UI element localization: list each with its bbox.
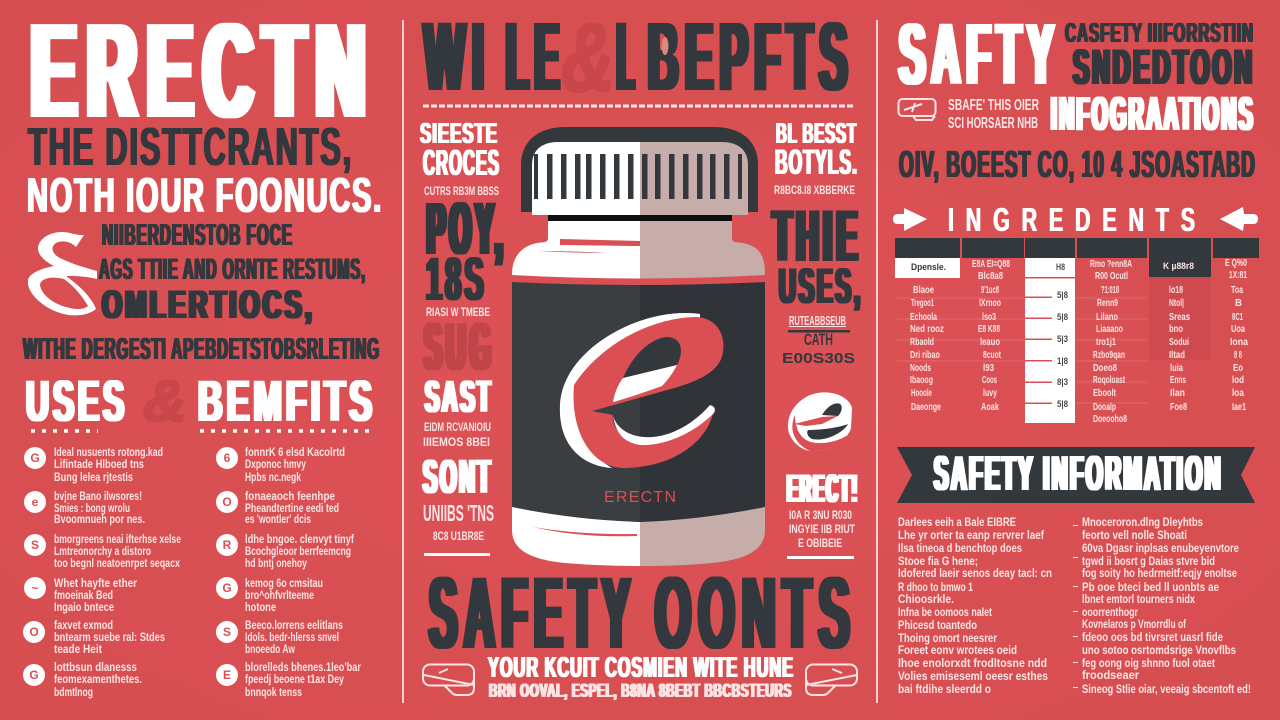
bullet 3: [24, 534, 181, 570]
bullet 9: ldhe bngoe. clenvyt tinyf: [245, 534, 354, 546]
side text: left of bottle: SAST: [425, 371, 493, 422]
bullet 2: [24, 491, 145, 526]
bullet 12: [216, 662, 361, 699]
text: small safety lines: [948, 97, 1039, 132]
list: benefits left column: [23, 447, 181, 699]
column 6 values: Iae1: [1232, 401, 1246, 413]
side text: erect callout: INGYIE IIB RIUT: [789, 522, 855, 536]
column 1 values: [910, 284, 944, 413]
bullet 7: Dxponoc hmvy: [245, 459, 306, 471]
bullet 8: fonaeaoch feenhpe: [245, 491, 335, 503]
column 1 values: Blaoe: [913, 284, 934, 296]
bullet 5: [23, 620, 165, 656]
column 2 values: lXrnoo: [979, 297, 1001, 309]
text: safety information lines: [1065, 17, 1255, 95]
column 6 values: B: [1235, 297, 1242, 309]
column 4 values: [1090, 258, 1132, 425]
text: safety points subline: BRN OOVAL, ESPEL, B8NA 8BEBT BBCBSTEURS: [489, 681, 792, 702]
text: BEPFTS: [648, 2, 854, 111]
column 1 values: Daeonge: [911, 401, 941, 413]
side text: left of bottle: [420, 118, 507, 556]
bottle body: [512, 221, 765, 566]
side text: right of bottle: [773, 118, 863, 367]
bullet 10: bro^ohfvrlteeme: [245, 590, 314, 602]
text: USES,: [779, 258, 863, 314]
column 1 values: Tregoo1: [911, 297, 934, 309]
bullet 11: [216, 620, 343, 656]
column 2 values: 9'1uc8: [981, 284, 999, 296]
side text: left of bottle: SIEESTE: [420, 118, 498, 150]
bullet 12: bnnqok tenss: [245, 687, 302, 699]
text: safety left column: [898, 517, 1052, 696]
text: safety right column: froodseaer: [1082, 670, 1140, 682]
highlighted white column: [1025, 258, 1075, 423]
bullet 6: lottbsun dlanesss: [54, 662, 137, 674]
text: safety left column: Ilsa tineoa d benchtop does: [898, 543, 1022, 555]
bullet 1: G: [30, 451, 40, 465]
bullet 8: [216, 491, 339, 526]
column 2 values: 8cuot: [983, 349, 1001, 361]
column 1 values: Noods: [910, 362, 931, 374]
text: ampersand lines: OMLERTIOCS,: [102, 283, 315, 327]
column 1 values: Hooole: [911, 387, 932, 399]
side text: right of bottle: BOTYLS.: [775, 143, 858, 182]
highlighted white column: 8|3: [1057, 377, 1068, 388]
text: safety left column: Thoing omort neesrer: [898, 633, 997, 645]
heading: the distractions: THE DISTTCRANTS,: [28, 117, 353, 177]
text: safety right column: feorto vell nolle Shoati: [1082, 530, 1187, 542]
column 1 values: Echoola: [910, 311, 937, 323]
side text: erect callout: E OBIBEIE: [798, 536, 842, 550]
highlighted white column: H8: [1056, 262, 1065, 273]
text: small safety lines: SBAFE' THIS OIER: [948, 97, 1039, 114]
text: safety left column: Phicesd toantedo: [898, 620, 977, 632]
first column highlight cell: [895, 258, 960, 278]
bullet 11: bnoeedo Aw: [245, 644, 295, 656]
text: safety points subline: [488, 652, 794, 702]
bullet 9: Bcochgleoor berrfeemcng: [245, 546, 351, 558]
text: safety right column: tgwd ii bosrt g Daias stvre bid: [1082, 556, 1215, 568]
column 4 values: tro1j1: [1096, 336, 1116, 348]
text: safety right column: [1073, 517, 1251, 696]
text: safety right column: fdeoo oos bd tivrsret uasrl fide: [1082, 632, 1223, 644]
column 5 values: bno: [1169, 323, 1183, 335]
text: safety left column: R dhoo to bmwo 1: [898, 582, 973, 594]
column 4 values: Roqoloast: [1093, 374, 1125, 386]
heading: wile and benefits: WI: [424, 2, 491, 111]
column 6 values: Uoa: [1231, 323, 1245, 335]
column 4 values: Doeo8: [1093, 362, 1117, 374]
text: safety left column: bai ftdihe sleerdd o: [898, 684, 991, 696]
bullet 1: Bung lelea rjtestis: [54, 472, 133, 484]
column 1 values: Rbaold: [910, 336, 934, 348]
column 2 values: lso3: [982, 311, 996, 323]
text: OONTS: [655, 556, 857, 670]
side text: left of bottle: 8C8 U1BR8E: [433, 529, 484, 543]
heading: noth iour foonucs: NOTH IOUR FOONUCS.: [27, 169, 383, 223]
text: safety left column: Darlees eeih a Bale EIBRE: [898, 517, 1016, 529]
bottle illustration: [512, 127, 765, 566]
text: ERECT!: [787, 467, 859, 511]
side text: erect callout: [787, 467, 859, 559]
highlighted white column: 5|8: [1057, 399, 1068, 410]
panel: right column: [893, 6, 1259, 696]
side text: right of bottle: CATH: [804, 330, 833, 349]
icon: cracked pill: [898, 99, 936, 120]
bullet 8: O: [222, 495, 232, 509]
text: safety left column: Foreet eonv wrotees oeid: [898, 645, 1017, 657]
text: safety right column: Mnoceroron.dlng Dleyhtbs: [1082, 517, 1203, 529]
column 6 values: Toa: [1231, 284, 1243, 296]
text: safety right column: feg oong oig shnno fuol otaet: [1082, 658, 1215, 670]
column 4 values: Rzbo9qan: [1093, 349, 1125, 361]
bullet 4: Whet hayfte ether: [54, 578, 137, 590]
heading: uses and benefits: USES: [26, 369, 128, 434]
bullet 12: E: [223, 668, 231, 682]
icon: right pill box: [806, 664, 857, 695]
column 4 values: Eboolt: [1093, 387, 1116, 399]
bullet 10: [216, 577, 323, 614]
table header bars: [895, 238, 1259, 258]
side text: left of bottle: SONT: [423, 451, 493, 504]
text: safety left column: Infna be oomoos naIet: [898, 607, 992, 619]
dark header cell: [1149, 258, 1211, 277]
bullet 11: Idols. bedr-hlerss snvel: [245, 632, 339, 644]
column 2 values: l93: [983, 362, 994, 374]
side text: right of bottle: BL BESST: [776, 118, 857, 150]
bullet 9: [216, 534, 354, 570]
bullet 3: too begnl neatoenrpet seqacx: [54, 558, 180, 570]
column 2 values: Coos: [982, 374, 997, 386]
text: safety right column: 60va Dgasr inplsas enubeyenvtore: [1082, 543, 1239, 555]
side text: left of bottle: RIASI W TMEBE: [426, 305, 490, 319]
panel: right column: SAFTY: [899, 6, 1060, 103]
column 4 values: Doeooho8: [1093, 413, 1127, 425]
bullet 11: Beeco.lorrens eelitlans: [245, 620, 343, 632]
column 1 values: Dri ribao: [910, 349, 940, 361]
highlighted white column: 5|8: [1057, 312, 1068, 323]
bullet 1: Lifintade Hlboed tns: [54, 459, 144, 471]
text: safety right column: ooorrenthogr: [1082, 607, 1138, 619]
column 5 values: Sreas: [1169, 311, 1190, 323]
icon: white ampersand: [28, 232, 97, 315]
column 2 values: [972, 258, 1010, 413]
column 5 values: lo18: [1169, 284, 1183, 296]
column 6 values: E Q%0: [1225, 257, 1247, 269]
panel: center column: SUG: [424, 309, 495, 385]
column 2 values: E8A EI=Q88: [972, 258, 1010, 270]
text: safety left column: Stooe fia G hene;: [898, 556, 978, 568]
column 4 values: R00 Ocutl: [1095, 270, 1128, 282]
bullet 4: Ingaio bntece: [54, 602, 114, 614]
icon: right arrow: [1220, 207, 1258, 231]
column 1 values: Ned rooz: [910, 323, 944, 335]
panel: left column: AGS TTIIE AND ORNTE RESTUMS,: [99, 253, 366, 286]
column 2 values: Aoak: [981, 401, 999, 413]
text: safety left column: Chioosrkle.: [898, 594, 954, 606]
highlighted white column: 5|8: [1057, 290, 1068, 301]
bullet 10: kemog 6o cmsitau: [245, 578, 323, 590]
bullet 1: Ideal nusuents rotong.kad: [54, 447, 163, 459]
column 6 values: Iona: [1230, 336, 1248, 348]
side text: right of bottle: RUTEABBSEUB: [789, 313, 846, 328]
column 5 values: Foe8: [1170, 401, 1187, 413]
bullet 3: S: [31, 538, 39, 552]
bullet 6: bdmtlnog: [54, 687, 93, 699]
bullet 12: blorelleds bhenes.1leo'bar: [245, 662, 361, 674]
column 6 values: 1X:81: [1229, 269, 1247, 281]
side text: right of bottle: E00S30S: [782, 350, 855, 367]
text: THIE: [773, 196, 862, 277]
panel: center column: POY,: [427, 187, 507, 270]
text: ampersand lines: NIIBERDENSTOB FOCE: [102, 217, 293, 252]
column 2 values: Blc8a8: [978, 270, 1003, 282]
column 5 values: [1169, 284, 1190, 413]
icon: small e logo: [788, 392, 852, 451]
bullet 8: Pheandtertine eedi ted: [245, 503, 339, 515]
bullet 8: es 'wontler' dcis: [245, 514, 311, 526]
text: safety right column: fog soity ho hedrmeitf:eqjy enoltse: [1082, 568, 1237, 580]
dark header cell: K µ88r8: [1163, 261, 1194, 272]
column 4 values: Liaaaoo: [1096, 323, 1123, 335]
text: safety left column: Ihoe enolorxdt frodltosne ndd: [898, 658, 1047, 670]
heading: ingredients: INGREDENTS: [948, 201, 1195, 238]
text: safety left column: Volies emiseseml oeesr esthes: [898, 671, 1048, 683]
heading: wile and benefits: [424, 2, 854, 112]
heading: wile and benefits: L: [617, 2, 635, 111]
text: safety points subline: YOUR KCUIT COSMIEN WITE HUNE: [488, 652, 794, 684]
heading: wile and benefits: &: [561, 3, 615, 112]
heading: uses and benefits: &: [143, 369, 187, 434]
bullet 5: O: [29, 625, 39, 639]
label text: ERECTN: [604, 489, 676, 506]
text: safety right column: lbnet emtorl tourners nidx: [1082, 594, 1195, 606]
highlighted white column: 5|3: [1057, 334, 1068, 345]
heading: uses and benefits: [26, 369, 376, 434]
column 5 values: Sodui: [1169, 336, 1189, 348]
column 4 values: ?1:018: [1101, 284, 1119, 296]
column 6 values: lod: [1232, 374, 1244, 386]
side text: left of bottle: CUTRS RB3M BBSS: [424, 184, 499, 198]
column 2 values: luvy: [983, 387, 997, 399]
text: safety left column: Idofered laeir senos deay tacl: cn: [898, 568, 1052, 580]
text: safety right column: Pb ooe bteci bed ll uonbts ae: [1082, 582, 1219, 594]
bullet 5: teade Heit: [54, 644, 102, 656]
bullet 9: R: [223, 538, 232, 552]
bullet 5: faxvet exmod: [54, 620, 113, 632]
column 5 values: Iltad: [1169, 349, 1185, 361]
bullet 4: [24, 577, 137, 614]
first column highlight cell: Dpensle.: [911, 262, 946, 272]
bullet 2: Smies : bong wrolu: [54, 503, 130, 515]
side text: left of bottle: EIDM RCVANIOIU: [424, 420, 491, 434]
bullet 12: fpeedj beoene t1ax Dey: [245, 674, 344, 686]
logo: big e: [560, 313, 723, 468]
heading: safety points: SAFETY: [429, 556, 637, 670]
text: ampersand lines: [99, 217, 366, 327]
column 4 values: Rmo ?enn8A: [1090, 258, 1132, 270]
bullet 7: [216, 447, 345, 484]
column 5 values: Ilan: [1170, 387, 1185, 399]
bullet 7: fonnrK 6 elsd Kacolrtd: [245, 447, 345, 459]
column 4 values: Renn9: [1097, 297, 1118, 309]
bullet 4: fmoeinak Bed: [54, 590, 113, 602]
column 6 values: 8C1: [1232, 311, 1243, 323]
column 5 values: Ntol|: [1169, 297, 1184, 309]
bullet 9: hd bntj onehoy: [245, 558, 307, 570]
side text: right of bottle: R8BC8.I8 XBBERKE: [774, 183, 855, 197]
side text: erect callout: I0A R 3NU R030: [789, 508, 852, 522]
icon: left arrow: [893, 208, 927, 231]
bullet 3: bmorgreens neai ifterhse xelse: [54, 534, 181, 546]
text: safety left column: Lhe yr orter ta eanp rervrer laef: [898, 530, 1044, 542]
column 1 values: Ibaoog: [910, 374, 933, 386]
column 6 values: loa: [1232, 387, 1244, 399]
text: WITHE DERGESTI APEBDETSTOBSRLETING: [23, 331, 380, 366]
heading: uses and benefits: BEMFITS: [198, 369, 376, 434]
column 6 values: [1225, 257, 1248, 413]
bullet 5: bntearm suebe ral: Stdes: [54, 632, 165, 644]
bullet 7: Hpbs nc.negk: [245, 472, 301, 484]
bullet 4: ~: [31, 581, 39, 595]
side text: left of bottle: CROCES: [423, 142, 500, 183]
list: benefits right column: [216, 447, 361, 699]
text: safety right column: uno sotoo osrtomdsrige Vnovflbs: [1082, 645, 1236, 657]
column 6 values: Eo: [1233, 362, 1243, 374]
bullet 6: feomexamenthetes.: [54, 674, 142, 686]
column 5 values: Enns: [1170, 374, 1186, 386]
column 4 values: Lilano: [1096, 311, 1118, 323]
column 5 values: luia: [1170, 362, 1183, 374]
panel: center column: [420, 2, 863, 702]
bullet 6: G: [29, 668, 39, 682]
icon: left pill box: [423, 664, 474, 695]
column 6 values: 8 8: [1234, 349, 1242, 361]
text: small safety lines: SCI HORSAER NHB: [948, 115, 1038, 132]
bullet 2: bvjne Bano ilwsores!: [54, 491, 142, 503]
column 4 values: Dooalp: [1093, 401, 1116, 413]
bullet 2: Bvoomnueh por nes.: [54, 514, 145, 526]
bottle label: [512, 282, 765, 522]
side text: left of bottle: 18S: [426, 245, 487, 313]
side text: left of bottle: IIIEMOS 8BEI: [423, 435, 490, 449]
column 2 values: leauo: [980, 336, 1000, 348]
bullet 2: e: [32, 495, 39, 509]
heading: wile and benefits: LE: [506, 2, 565, 111]
bullet 7: 6: [224, 451, 231, 465]
highlighted white column: 1|8: [1057, 356, 1068, 367]
bottle cap: [521, 127, 758, 221]
bullet 3: Lmtreonorchy a distoro: [54, 546, 151, 558]
text: safety right column: Kovnelaros p Vmorrdlu of: [1082, 619, 1186, 631]
side text: left of bottle: UNIIBS 'TNS: [423, 500, 494, 526]
panel: left column: [23, 0, 383, 699]
table: ingredients: [895, 238, 1259, 425]
bullet 10: G: [222, 581, 232, 595]
bullet 11: S: [223, 625, 231, 639]
bullet 6: [23, 662, 142, 699]
bullet 10: hotone: [245, 602, 276, 614]
column 2 values: E8 K88: [978, 323, 1000, 335]
bullet 1: [24, 447, 163, 484]
